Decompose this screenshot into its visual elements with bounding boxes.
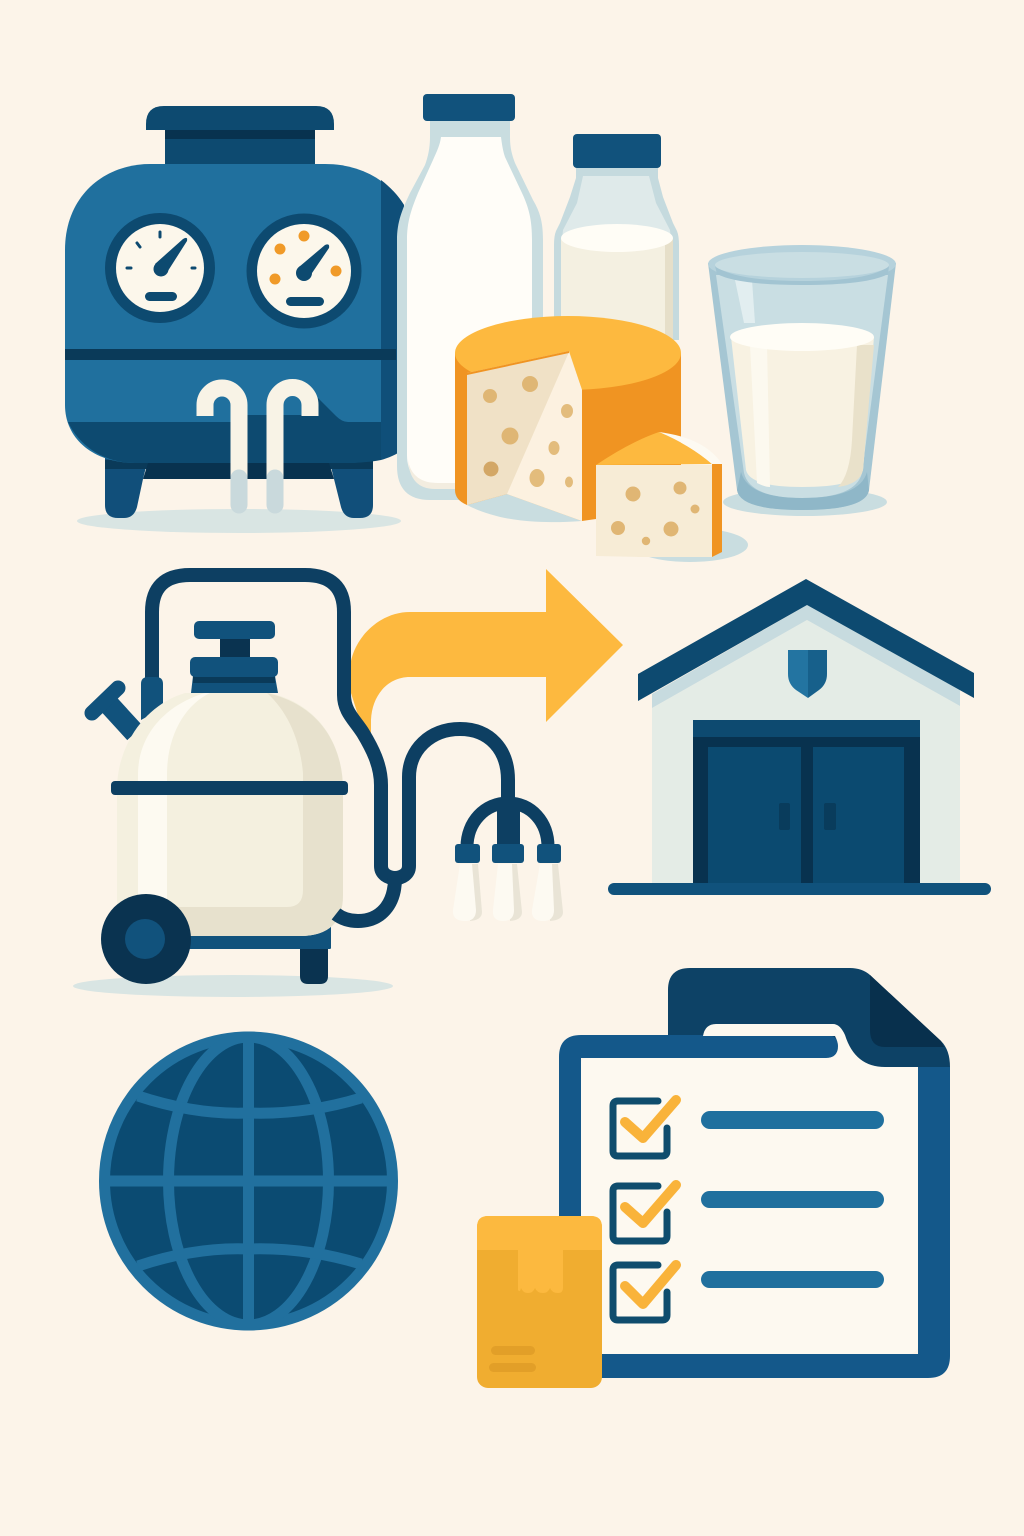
- outlet pipes: [205, 388, 310, 505]
- small cheese wedge: [596, 432, 748, 562]
- shield emblem: [788, 650, 827, 698]
- checklist clipboard: [559, 968, 950, 1378]
- curved arrow: [350, 569, 623, 735]
- milking claw with teat cups: [453, 803, 563, 921]
- small milk bottle: [554, 134, 679, 348]
- left gauge: [105, 213, 215, 323]
- lower hose: [336, 878, 395, 921]
- checklist row 2: [613, 1185, 884, 1241]
- checklist row 1: [613, 1100, 884, 1156]
- cream milk can: [117, 693, 343, 936]
- checklist row 3: [613, 1265, 884, 1320]
- paper: [581, 1024, 918, 1354]
- machine hose to grip: [152, 575, 508, 878]
- globe: [100, 1032, 398, 1330]
- milking machine leg and frame: [170, 920, 331, 984]
- milk glass: [708, 245, 896, 516]
- can top: [190, 621, 278, 693]
- cardboard box: [477, 1216, 602, 1388]
- warehouse: [608, 579, 991, 895]
- valve handle: [92, 688, 135, 733]
- right gauge: [246, 214, 362, 328]
- warehouse door: [693, 720, 920, 883]
- wheel: [101, 894, 191, 984]
- large milk bottle: [397, 94, 543, 500]
- cheese wheel with cut wedge: [455, 316, 681, 522]
- portable milking machine: [73, 575, 508, 997]
- clipboard back: [668, 968, 950, 1075]
- milk cooling tank with gauges: [65, 106, 404, 533]
